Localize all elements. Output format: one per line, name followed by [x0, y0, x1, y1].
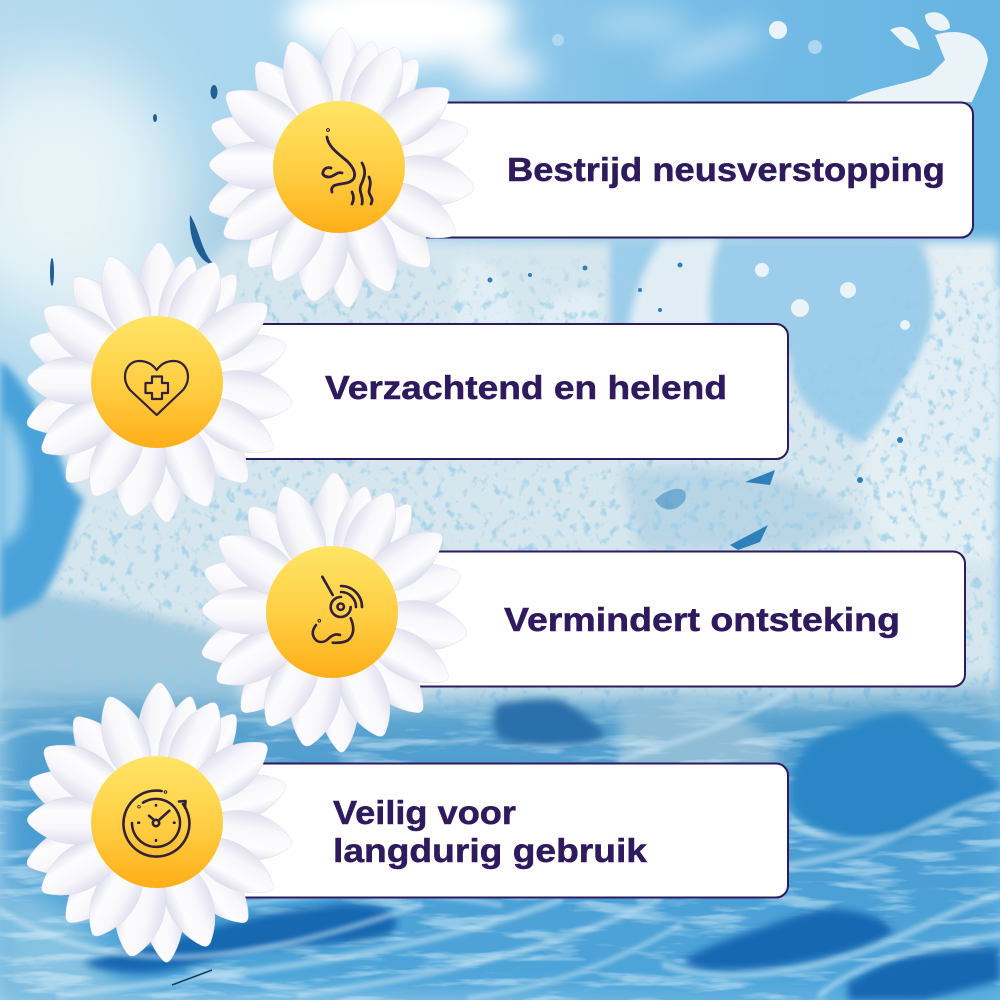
wave at left	[0, 360, 84, 620]
card 2	[200, 324, 788, 459]
label: Bestrijd neusverstopping: Bestrijd neusverstopping	[507, 151, 945, 188]
label: Veilig voor langdurig gebruik: Veilig voor	[333, 794, 516, 831]
deep water patches	[83, 699, 1000, 1000]
icon: clock with circular arrow	[123, 791, 189, 857]
flower 4 with clock icon	[20, 682, 296, 964]
card 3	[380, 552, 965, 686]
dark droplets left	[50, 85, 218, 286]
label: Verzachtend en helend: Verzachtend en helend	[325, 369, 727, 406]
label: Vermindert ontsteking: Vermindert ontsteking	[504, 601, 900, 638]
splash specks	[488, 262, 903, 550]
icon: heart with cross	[125, 361, 188, 415]
sea texture	[0, 680, 1000, 1000]
label: Veilig voor langdurig gebruik: langdurig gebruik	[333, 832, 648, 869]
droplets	[552, 12, 988, 330]
foam mass	[0, 240, 1000, 720]
card 1	[380, 102, 973, 238]
flower 2 with heart icon	[20, 242, 296, 524]
clouds	[0, 60, 280, 380]
card 4	[200, 764, 788, 898]
flower 1 with nose icon	[202, 27, 478, 309]
foam texture	[53, 258, 1000, 709]
dark crack on the sea	[172, 970, 212, 985]
splash foam	[455, 238, 1000, 460]
flower 3 with nose and signal icon	[195, 472, 471, 754]
sea	[0, 690, 1000, 1000]
sky window at right	[610, 240, 933, 443]
icon: nose with inflammation signal	[313, 577, 362, 643]
light wave streaks	[0, 690, 1000, 998]
icon: nose with scent waves	[323, 130, 372, 204]
